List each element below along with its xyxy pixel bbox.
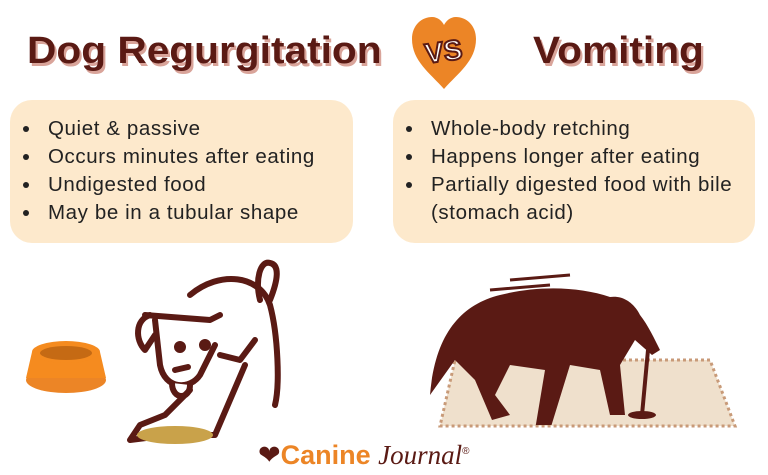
panel: vomiting traits: Partially digested food with bile — [431, 173, 732, 196]
panel: regurgitation traits: Undigested food — [48, 173, 206, 196]
title: regurgitation: Dog Regurgitation — [27, 30, 382, 72]
illustration: rug — [438, 358, 738, 428]
panel: vomiting traits: Happens longer after eating — [431, 145, 700, 168]
panel: vomiting traits — [393, 100, 755, 243]
logo: Canine Journal: ❤Canine Journal® — [258, 440, 470, 470]
illustration: regurgitating dog — [127, 260, 281, 444]
panel: vomiting traits: Whole-body retching — [431, 117, 630, 140]
icon: vs heart — [412, 17, 476, 89]
panel: regurgitation traits — [10, 100, 353, 243]
illustration: vomiting dog — [430, 274, 660, 425]
panel: regurgitation traits: Occurs minutes after eating — [48, 145, 315, 168]
panel: regurgitation traits: May be in a tubular shape — [48, 201, 299, 224]
illustration: bowl — [26, 341, 106, 393]
panel: regurgitation traits: Quiet & passive — [48, 117, 201, 140]
icon: vs heart: VS — [423, 34, 464, 69]
title: vomiting: Vomiting — [533, 30, 704, 72]
panel: vomiting traits: (stomach acid) — [431, 201, 574, 224]
